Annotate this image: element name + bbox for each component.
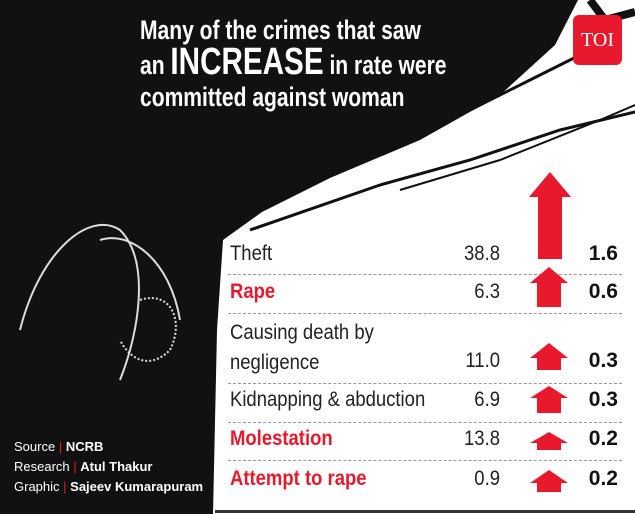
source credits: Source | NCRB	[14, 439, 103, 454]
row: rape: 0.6	[589, 280, 618, 303]
row: causing death: negligence	[230, 351, 319, 374]
title: an INCREASE in rate were	[140, 41, 447, 83]
row: attempt to rape: 0.2	[589, 467, 618, 490]
row: causing death: 11.0	[465, 349, 500, 372]
row: theft: Theft	[230, 242, 272, 265]
logo: TOI: TOI	[581, 29, 614, 51]
row: kidnapping: Kidnapping & abduction	[230, 388, 425, 411]
row: causing death: 0.3	[589, 349, 618, 372]
arrow: attempt	[530, 470, 568, 492]
row: molestation: 0.2	[589, 427, 618, 450]
row: theft: 1.6	[589, 242, 618, 265]
logo: TOI	[573, 15, 622, 65]
row: attempt to rape	[230, 467, 618, 490]
row: kidnapping: 6.9	[474, 388, 500, 411]
source credits: Research | Atul Thakur	[14, 459, 152, 474]
title: Many of the crimes that saw	[140, 15, 421, 45]
source credits: Graphic | Sajeev Kumarapuram	[14, 479, 203, 494]
row: rape: 6.3	[474, 280, 500, 303]
row: rape	[230, 280, 618, 303]
arrow: kidnapping	[530, 386, 568, 413]
title	[140, 15, 447, 112]
row: causing death: Causing death by	[230, 321, 374, 344]
row: causing death	[230, 321, 618, 374]
row: molestation: Molestation	[230, 427, 333, 450]
row: attempt to rape: 0.9	[474, 467, 500, 490]
row: theft	[230, 242, 618, 265]
arrow: causing death	[530, 343, 568, 370]
arrow: theft	[529, 172, 571, 259]
row: theft: 38.8	[464, 242, 500, 265]
row: attempt to rape: Attempt to rape	[230, 467, 367, 490]
source credits	[14, 439, 203, 494]
row: kidnapping: 0.3	[589, 388, 618, 411]
arrow: rape	[530, 267, 568, 307]
row: molestation	[230, 427, 618, 450]
row: kidnapping	[230, 388, 618, 411]
title: committed against woman	[140, 82, 404, 112]
row: rape: Rape	[230, 280, 275, 303]
arrow: molestation	[530, 432, 568, 450]
row: molestation: 13.8	[464, 427, 500, 450]
